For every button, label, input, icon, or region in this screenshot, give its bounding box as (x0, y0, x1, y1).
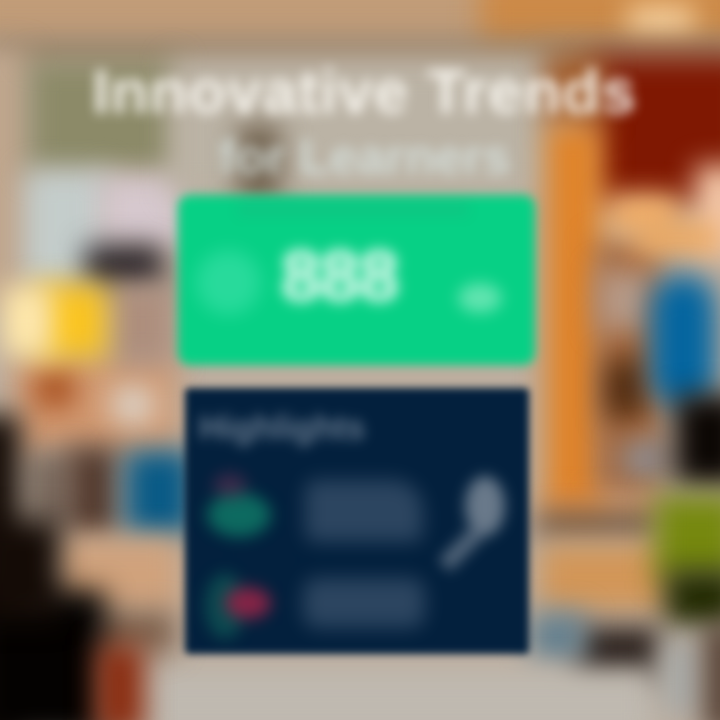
icon: small trend (458, 283, 502, 313)
title: for Learners (219, 129, 510, 185)
panel: green stats (178, 195, 535, 365)
icon: green and red cluster (200, 466, 278, 546)
text block one (305, 480, 423, 542)
icon: red and green cluster (200, 569, 280, 643)
title: Innovative Trends (92, 58, 637, 127)
icon: faint chart (196, 250, 261, 315)
panel heading (238, 203, 468, 215)
icon: magnifier (434, 468, 514, 576)
text block two (303, 578, 425, 628)
big white number: 888 (281, 237, 398, 317)
title (88, 58, 642, 185)
panel heading: Highlights (199, 409, 365, 447)
panel: navy details (185, 388, 529, 654)
